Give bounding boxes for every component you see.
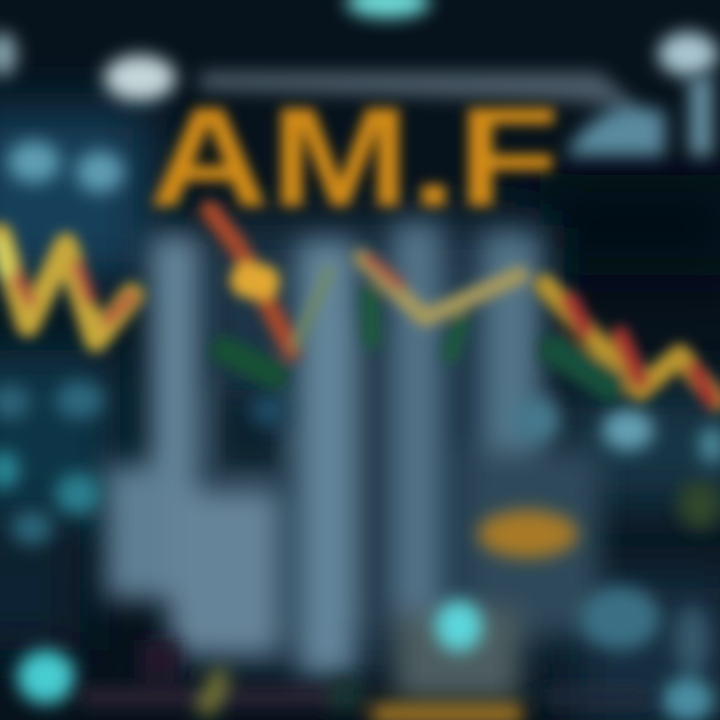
title: AM.F bbox=[148, 78, 560, 237]
swoosh at top right bbox=[200, 72, 712, 156]
line chart main bbox=[210, 210, 716, 400]
line chart left bbox=[0, 235, 132, 340]
towers bbox=[105, 222, 600, 700]
bottom strip bbox=[80, 640, 650, 720]
